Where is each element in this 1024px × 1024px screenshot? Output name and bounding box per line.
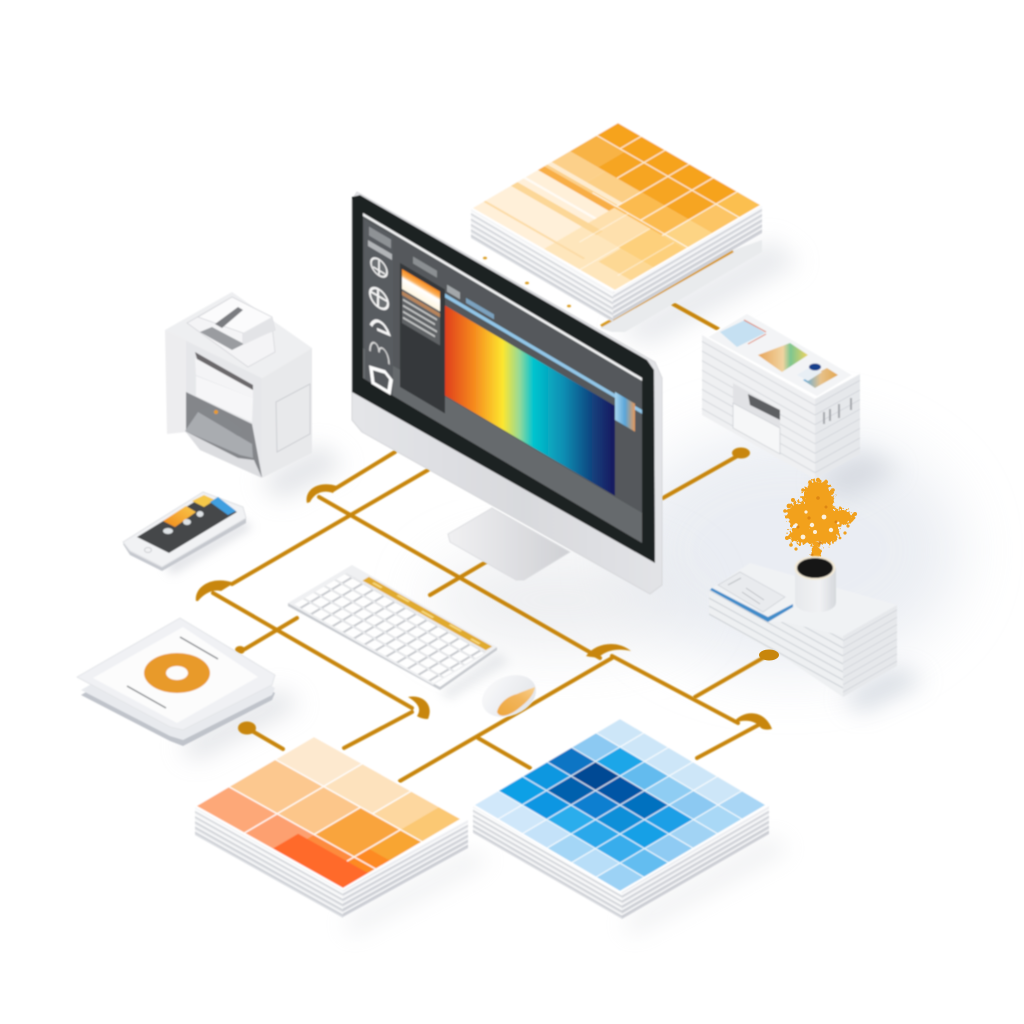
yellow function strip [363,577,492,650]
white rim [473,718,767,892]
sidebar icon: arrow [371,316,389,336]
preview thumbnail [615,392,635,432]
scanner bed [187,300,275,367]
connector lines [196,304,772,781]
light thumbnails [163,511,204,534]
orange top grid [195,736,462,889]
keyboard [288,565,497,690]
layers panel [400,263,445,413]
screen [363,213,642,543]
cabinet right side [262,348,312,478]
scanner lid [198,297,275,345]
sidebar icon: globe [371,255,387,280]
screen background [363,213,642,543]
right stack face [613,204,762,320]
lower drawer [196,376,253,422]
top colour tile [192,495,215,507]
mouse body [476,667,542,725]
orange image on screen [163,506,196,527]
lower tablet layers [81,633,275,746]
keyboard edge [288,603,497,690]
printer left body [702,335,815,479]
soft ground shadows [165,240,960,935]
strip mottling [372,582,482,644]
tray recess [186,392,262,477]
spectrum gradient [445,305,615,496]
connector node: shelf dot [759,650,779,660]
cabinet top [165,292,312,378]
printer top [707,313,853,397]
stacked slab: orange data grid [195,736,468,918]
key grid [294,573,486,683]
phone screen [137,496,237,553]
phone edge [123,496,246,571]
keyboard deck [288,565,497,685]
sidebar icon: large pot [371,364,391,394]
top highlight [363,213,642,381]
connector: centre junction to right junction [612,656,738,723]
header line [180,637,218,659]
printer right body [815,374,860,479]
tray [185,406,262,478]
connector: lower junction to orange slab [344,712,412,748]
stacked slab: amber data grid [471,122,762,332]
white rim [195,736,462,889]
shelf left face [709,594,844,694]
left column [165,330,186,434]
left stack face [195,806,343,918]
right stack face [343,820,468,917]
smartphone [123,492,246,571]
connector: slab to printer [673,304,718,329]
connector: monitor to printer dot [663,454,741,498]
low paper stack shelf [709,572,898,696]
paper comb [195,352,253,391]
left multifunction printer [165,292,312,478]
output slot [748,394,780,420]
silver frame [352,192,662,594]
junction cap: left [196,580,234,601]
lower band [363,348,642,543]
monitor stand [448,508,570,580]
sidebar icon: network [370,284,388,313]
potted orange plant [783,478,857,612]
connector: blue slab to right junction [697,722,764,758]
amber top grid [471,122,762,291]
blue status bar [210,497,236,515]
junction cap: upper [307,484,337,503]
connector: monitor to upper junction [333,452,395,490]
mouse orange insert [497,687,535,716]
stacked slab: blue data grid [473,718,769,919]
junction cap: right [733,713,772,730]
donut chart [144,653,210,693]
sidebar icon: loops [370,340,389,364]
connector: left junction to lower junction [213,593,412,708]
desktop monitor [352,192,662,594]
paper opening [733,383,780,453]
phone body [123,492,246,567]
caption line [127,686,166,708]
printed sample thumbnails [720,320,838,388]
paper tray [733,403,780,454]
connector: dot to orange slab [247,728,283,749]
tablet top [77,618,275,730]
book with blue edge [710,572,793,622]
connector node: printer dot [732,448,750,458]
scattered leaves [783,478,857,551]
connector: monitor to left junction [232,470,428,584]
connector node: orange slab dot [238,722,256,734]
connector: tablet stub [245,618,297,649]
cabinet interior [185,340,262,477]
plant pot [794,556,836,612]
left stack face [473,805,622,919]
front control panel [823,398,852,424]
shelf top [709,563,897,636]
mouse [476,667,542,725]
plant foliage [783,478,857,563]
sidebar [365,220,393,396]
connector: orange slab to centre junction [400,658,612,781]
base plate and gold edge [600,240,762,332]
junction cap: lower [408,697,430,719]
blue top grid [473,718,767,892]
tablet screen [93,627,258,723]
small gold pins [483,257,571,307]
right wide-format printer [702,313,860,479]
connector: stand stub [430,562,486,595]
left stack face [471,208,613,322]
connector: blue slab stub [478,738,530,768]
upper drawer [195,358,253,398]
connector: upper junction to centre junction [319,497,600,658]
right stack face [622,806,769,919]
junction cap: centre [586,644,631,658]
home button [144,548,152,552]
tablet [77,618,275,746]
shelf right face [843,605,897,697]
white rim [471,122,762,291]
scanner slot shadow [200,327,244,350]
connector: shelf dot line [695,655,768,697]
blue title strip [445,293,642,414]
top tool tabs [413,257,494,319]
black bezel [352,195,655,563]
isometric workflow illustration [76,122,964,922]
connector: tablet stub end [235,646,245,654]
